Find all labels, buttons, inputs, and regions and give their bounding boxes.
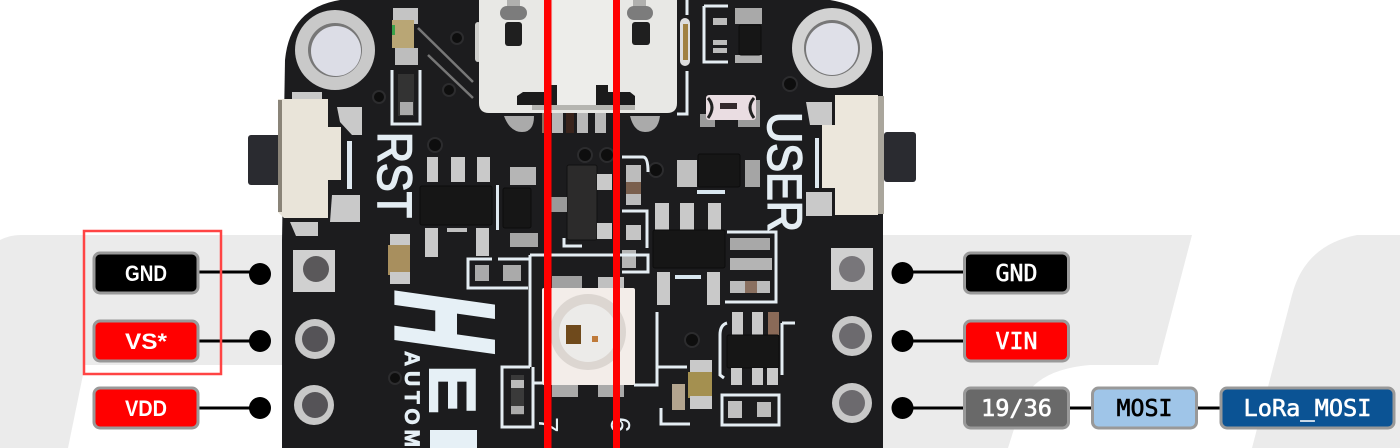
pad: VS left: [295, 319, 335, 359]
vias: [373, 32, 797, 384]
left pads: [293, 250, 335, 425]
bracketed resistor: lower right: [722, 395, 779, 425]
pin label: GND right: GND: [996, 261, 1038, 287]
regulator IC: RST side: [420, 157, 538, 257]
red highlight lines: [544, 0, 620, 448]
left pin connectors: [199, 263, 271, 419]
pad: GND left: [293, 250, 335, 292]
silk brackets around LED: [468, 255, 687, 427]
pad: GND right: [831, 248, 873, 290]
silkscreen logo: E: E: [416, 365, 489, 414]
silkscreen logo: AUTOM: AUTOM: [400, 351, 423, 447]
pin label: MOSI: [1092, 388, 1196, 428]
background watermark shapes: [0, 235, 1400, 448]
pin label: LoRa_MOSI: LoRa_MOSI: [1244, 396, 1372, 422]
switch: USER side: [806, 95, 916, 216]
pin label: LoRa_MOSI: [1221, 388, 1394, 428]
pad: VDD left: [294, 385, 334, 425]
pad: 19/36 right: [832, 383, 872, 423]
user tactile button: [700, 95, 760, 127]
central regulator: [548, 148, 614, 246]
silkscreen logo: H: H: [367, 283, 521, 362]
pin label: VS*: [94, 321, 198, 361]
right pin connectors: [892, 262, 1220, 419]
pin label: VIN: VIN: [996, 329, 1038, 355]
LED and resistor: top left: [392, 8, 473, 124]
pad: VIN right: [832, 316, 872, 356]
mounting hole: top left: [295, 10, 375, 90]
pin label: 19/36: [964, 388, 1068, 428]
switch: RST side: [248, 92, 362, 236]
pin label: VS*: VS*: [125, 329, 167, 354]
pin label: VIN: [964, 321, 1068, 361]
pin label: GND left: [94, 253, 198, 293]
silkscreen pin numbers: 6: [605, 417, 636, 433]
silkscreen logo fragment: [430, 430, 477, 448]
pin label: GND left: GND: [125, 261, 167, 286]
pin label: GND right: [964, 253, 1068, 293]
capacitor and resistor: lower right: [661, 360, 712, 424]
mounting hole: top right: [792, 8, 872, 88]
red highlight box: [84, 231, 221, 374]
capacitor array bracket: [725, 232, 776, 302]
diode: centre right: [677, 154, 760, 194]
RGB LED: [542, 276, 635, 397]
silkscreen label: RST: RST: [367, 132, 420, 218]
right resistors and silk brackets: [622, 157, 648, 268]
circuit board: [248, 0, 916, 448]
USB connector: [475, 0, 690, 133]
right pads: [831, 248, 873, 423]
pin label: VDD: [94, 388, 198, 428]
capacitor: left: [388, 234, 410, 284]
pin label: VDD: VDD: [125, 396, 167, 421]
IC: lower right: [720, 312, 795, 385]
silkscreen pin numbers: 7: [533, 417, 564, 433]
pin label: 19/36: 19/36: [981, 396, 1052, 422]
pin label: MOSI: MOSI: [1116, 396, 1172, 422]
silkscreen label: USER: USER: [757, 112, 810, 232]
silkscreen pin numbers: [533, 417, 636, 433]
transistor pads: centre right: [653, 203, 725, 305]
top right components: [704, 6, 762, 63]
